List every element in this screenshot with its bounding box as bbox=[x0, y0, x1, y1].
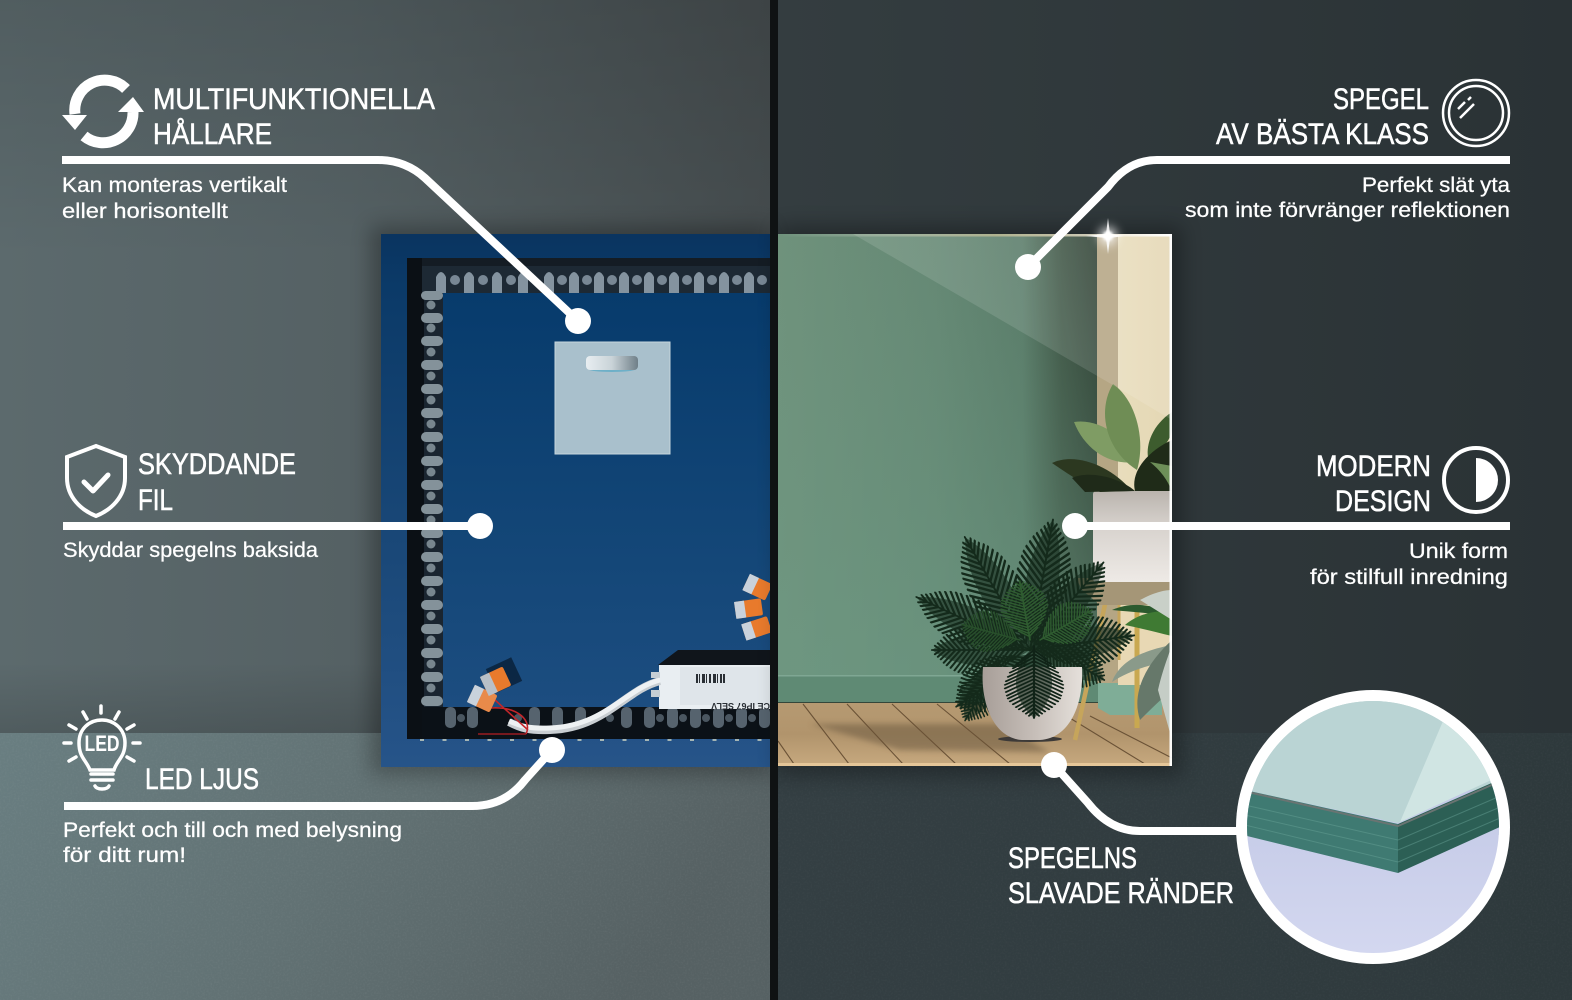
heading: MULTIFUNKTIONELLA bbox=[153, 83, 435, 116]
description: eller horisontellt bbox=[62, 200, 228, 223]
leader line bbox=[62, 160, 591, 334]
heading: DESIGN bbox=[1335, 485, 1431, 518]
leader line bbox=[1015, 160, 1510, 280]
fern plant bbox=[907, 515, 1137, 731]
panel: back of mirror bbox=[371, 226, 773, 774]
heading: AV BÄSTA KLASS bbox=[1216, 118, 1429, 151]
icon: rotating arrows bbox=[62, 80, 144, 143]
heading bbox=[1316, 450, 1431, 518]
heading bbox=[1008, 842, 1234, 910]
inner blue backing film bbox=[443, 293, 770, 707]
heading bbox=[138, 448, 296, 517]
fern front frond bbox=[1005, 646, 1063, 718]
heading: LED LJUS bbox=[145, 763, 259, 796]
leader line bbox=[1041, 752, 1240, 831]
callout: multifunktionella hållare bbox=[62, 80, 591, 334]
icon: shield bbox=[67, 446, 125, 516]
floor pot bbox=[983, 667, 1082, 742]
heading bbox=[153, 83, 435, 151]
description: Perfekt och till och med belysning bbox=[63, 819, 402, 842]
description bbox=[1185, 174, 1510, 222]
wooden floor bbox=[778, 703, 1172, 766]
sparkle on mirror corner bbox=[1086, 218, 1124, 254]
upper plant bbox=[1052, 384, 1172, 492]
description: Kan monteras vertikalt bbox=[62, 174, 287, 197]
description: för stilfull inredning bbox=[1310, 566, 1508, 589]
mirror edges bbox=[778, 234, 1172, 766]
icon: round mirror bbox=[1443, 80, 1509, 146]
LED driver bbox=[651, 650, 770, 711]
background: right wall and floor bbox=[778, 0, 1572, 1000]
description bbox=[63, 819, 402, 867]
heading: SKYDDANDE bbox=[138, 448, 296, 481]
LED driver: CE IP67 SELV bbox=[711, 701, 770, 711]
description: Perfekt slät yta bbox=[1362, 174, 1510, 197]
leader line bbox=[63, 513, 493, 539]
heading: SLAVADE RÄNDER bbox=[1008, 877, 1234, 910]
description: Unik form bbox=[1409, 540, 1508, 563]
icon: LED bulb: LED bbox=[84, 731, 120, 756]
cable and connectors bbox=[467, 574, 773, 734]
callout: skyddande fil bbox=[63, 446, 493, 562]
description bbox=[1310, 540, 1508, 589]
callout: modern design bbox=[1062, 448, 1510, 589]
description: som inte förvränger reflektionen bbox=[1185, 199, 1510, 222]
callout: led ljus bbox=[63, 706, 565, 867]
LED frame bbox=[407, 258, 770, 740]
background: left wall and floor bbox=[0, 0, 770, 1000]
mounting plate bbox=[555, 342, 670, 454]
leader line bbox=[1062, 513, 1510, 539]
upper white pot bbox=[1093, 491, 1172, 582]
teal box and stool bbox=[1075, 578, 1172, 740]
panel: front of mirror bbox=[778, 226, 1182, 776]
green wall bbox=[778, 234, 1098, 703]
lower right plant bbox=[1112, 590, 1172, 740]
leader line bbox=[64, 737, 565, 806]
icon: half circle bbox=[1444, 448, 1508, 512]
divider line bbox=[770, 0, 778, 1000]
heading: HÅLLARE bbox=[153, 118, 272, 151]
glass reflection bbox=[853, 234, 1172, 420]
heading: FIL bbox=[138, 484, 173, 517]
wooden column bbox=[1097, 234, 1172, 684]
heading: SPEGEL bbox=[1333, 83, 1429, 116]
heading bbox=[1216, 83, 1429, 151]
description: för ditt rum! bbox=[63, 844, 186, 867]
heading: MODERN bbox=[1316, 450, 1431, 483]
callout: spegelns slavade ränder bbox=[1008, 690, 1510, 964]
description: Skyddar spegelns baksida bbox=[63, 539, 318, 562]
callout: spegel av bästa klass bbox=[1015, 80, 1510, 280]
icon: LED bulb bbox=[64, 706, 140, 789]
detail circle: beveled glass edge bbox=[1236, 690, 1510, 964]
heading: SPEGELNS bbox=[1008, 842, 1137, 875]
description bbox=[62, 174, 287, 223]
